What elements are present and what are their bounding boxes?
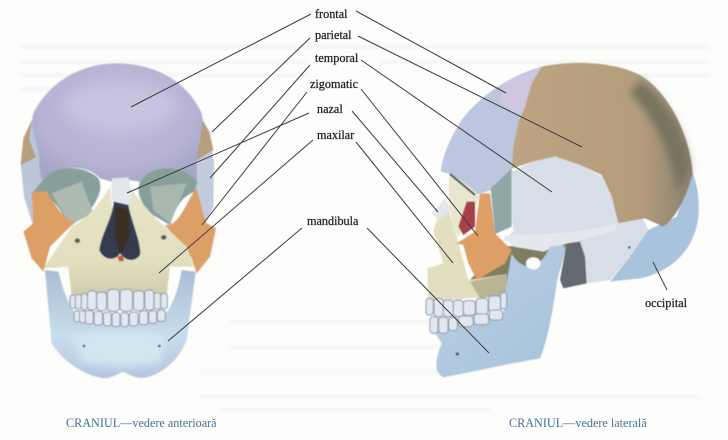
bone labels: temporal xyxy=(315,51,359,65)
skull: anterior view xyxy=(21,63,216,378)
bone labels: zigomatic xyxy=(310,77,359,91)
bone labels: frontal xyxy=(315,7,348,21)
parietal and temporal side bones xyxy=(21,113,214,227)
frontal bone xyxy=(441,67,542,195)
bone labels: parietal xyxy=(315,28,352,42)
occipital bone xyxy=(610,170,699,282)
nasal cavity xyxy=(99,202,140,260)
ear and base xyxy=(560,242,587,288)
mandibular notch hole xyxy=(526,257,541,269)
mandible xyxy=(45,270,196,378)
nasal bone xyxy=(112,177,132,205)
frontal bone xyxy=(32,63,202,182)
skull: lateral view xyxy=(426,63,699,377)
caption: lateral view: CRANIUL—vedere laterală xyxy=(509,416,647,430)
teeth xyxy=(426,293,507,333)
face maxilla xyxy=(427,198,507,302)
bone labels: occipital xyxy=(645,296,688,310)
temporal bone xyxy=(503,157,648,283)
leader lines xyxy=(127,11,667,353)
mental foramen xyxy=(456,352,459,356)
orbit: left xyxy=(33,168,100,228)
sphenoid and orbit wall xyxy=(491,168,512,234)
dark area below arch xyxy=(470,243,567,293)
bone labels xyxy=(307,7,688,310)
foramina xyxy=(75,235,166,347)
zygomatic bones xyxy=(23,188,216,273)
bone labels: maxilar xyxy=(317,128,354,142)
teeth xyxy=(70,289,167,327)
bone labels: nazal xyxy=(317,102,343,116)
zygomatic bone xyxy=(457,193,512,280)
eye socket xyxy=(449,173,480,237)
maxilla xyxy=(43,187,194,295)
bone labels: mandibula xyxy=(307,214,359,228)
nasal bone xyxy=(432,198,452,220)
caption: anterior view: CRANIUL—vedere anterioară xyxy=(66,416,217,430)
faint show-through page text xyxy=(20,45,710,412)
mastoid hole xyxy=(628,246,631,249)
orbit: right xyxy=(138,168,197,225)
mandible xyxy=(430,245,565,377)
parietal bone xyxy=(512,63,693,227)
